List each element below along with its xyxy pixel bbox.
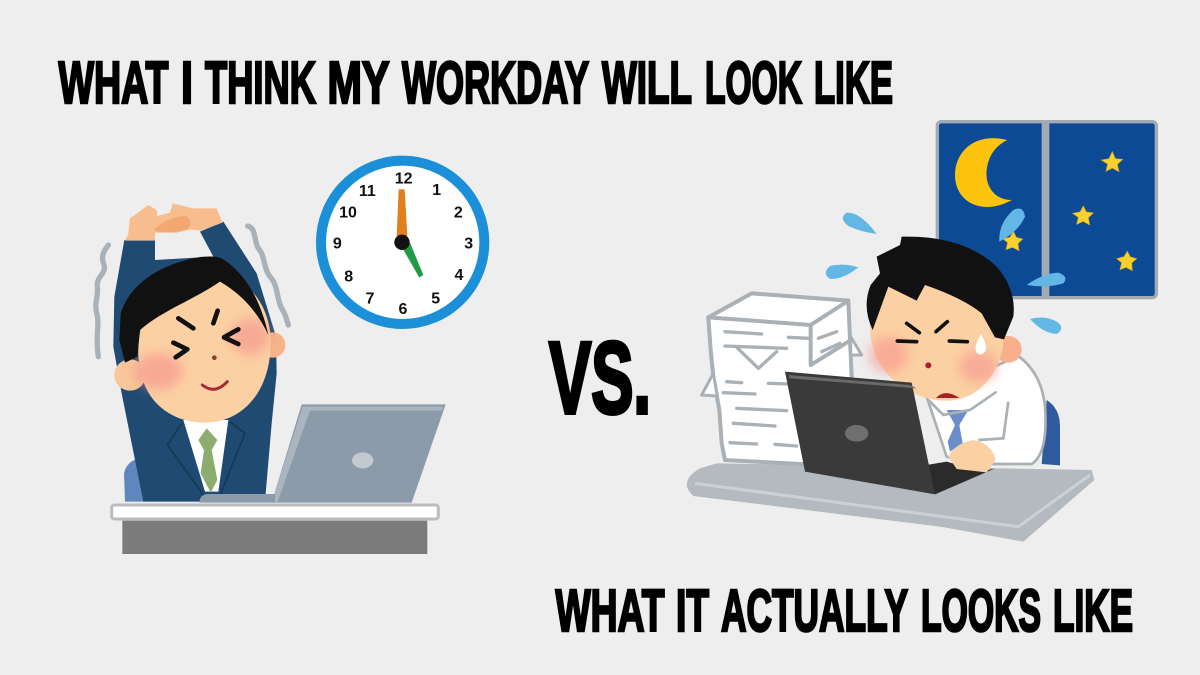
chair back <box>1042 400 1060 465</box>
stack of paper <box>702 293 862 465</box>
icon: wall clock showing five o'clock: 11 <box>359 183 376 200</box>
open silver laptop <box>199 404 446 503</box>
head with closed squinting eyes and smile <box>114 257 285 423</box>
icon: wall clock showing five o'clock: 12 <box>395 170 413 187</box>
icon: wall clock showing five o'clock: 9 <box>333 235 342 252</box>
heading: what it actually looks like: LIKE <box>1053 577 1133 644</box>
heading: what I think my workday will look like: LOOK <box>705 49 802 116</box>
illustration: relaxed worker stretching at desk <box>96 161 484 554</box>
desk <box>112 505 438 554</box>
icon: wall clock showing five o'clock: 10 <box>339 204 357 221</box>
heading: what I think my workday will look like: WORKDAY <box>402 49 589 116</box>
head with tired face <box>867 237 1022 401</box>
icon: wall clock showing five o'clock: 7 <box>366 290 375 307</box>
icon: motion lines beside the arms <box>96 226 288 357</box>
icon: wall clock showing five o'clock: 2 <box>454 204 463 221</box>
heading: what it actually looks like: WHAT <box>556 577 664 644</box>
icon: wall clock showing five o'clock: 1 <box>432 182 441 199</box>
icon: wall clock showing five o'clock: 4 <box>455 267 464 284</box>
heading: what I think my workday will look like <box>58 49 893 116</box>
heading: what I think my workday will look like: LIKE <box>814 49 893 116</box>
heading: what I think my workday will look like: THINK <box>205 49 316 116</box>
icon: wall clock showing five o'clock <box>321 161 484 324</box>
sweat drop on temple <box>976 334 986 354</box>
chair back <box>124 458 145 502</box>
desk top <box>687 463 1094 542</box>
heading: what I think my workday will look like: WHAT <box>58 49 168 116</box>
hand on keyboard <box>948 440 996 472</box>
heading: what I think my workday will look like: WILL <box>602 49 692 116</box>
heading: what it actually looks like: ACTUALLY <box>721 577 908 644</box>
heading: what it actually looks like: LOOKS <box>921 577 1041 644</box>
dark laptop <box>785 372 996 494</box>
heading: what I think my workday will look like: I <box>181 49 193 116</box>
heading: what it actually looks like: IT <box>676 577 709 644</box>
heading: what it actually looks like <box>556 577 1133 644</box>
window with night sky <box>937 122 1156 298</box>
icon: wall clock showing five o'clock: 3 <box>464 235 473 252</box>
hands clasped overhead <box>125 203 223 241</box>
icon: wall clock showing five o'clock: 5 <box>431 290 440 307</box>
heading: what I think my workday will look like: MY <box>328 49 390 116</box>
sweat drops flying off <box>826 208 1065 334</box>
icon: wall clock showing five o'clock: 8 <box>344 269 353 286</box>
icon: wall clock showing five o'clock: 6 <box>399 301 408 318</box>
icon: stars <box>1003 152 1137 271</box>
illustration: exhausted worker at night <box>687 122 1156 542</box>
shirt and green tie <box>167 420 245 502</box>
icon: crescent moon <box>955 138 1012 207</box>
heading: vs.: VS. <box>549 321 651 435</box>
white shirt <box>927 356 1046 464</box>
collar and blue tie <box>928 392 1008 452</box>
suit jacket and raised arms <box>113 222 277 502</box>
